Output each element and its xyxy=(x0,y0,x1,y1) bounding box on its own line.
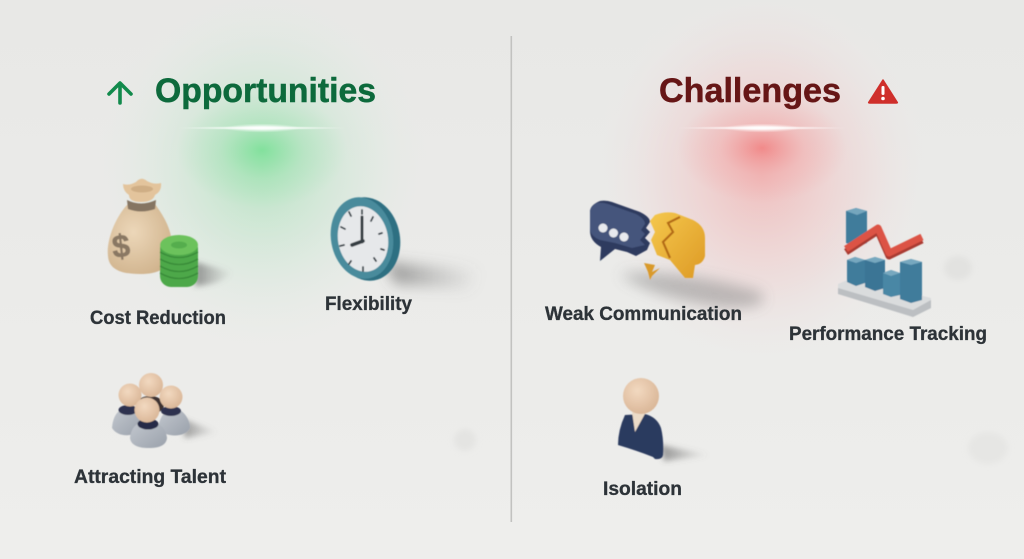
left person xyxy=(112,384,143,435)
label: Cost Reduction: Cost Reduction xyxy=(90,308,226,329)
top bar xyxy=(846,208,867,247)
label: Attracting Talent: Attracting Talent xyxy=(74,467,227,488)
label: Performance Tracking: Performance Tracking xyxy=(789,324,987,345)
chart base xyxy=(838,278,931,317)
icon: money bag and coins xyxy=(108,179,232,287)
back person xyxy=(136,373,164,414)
heading: Challenges: Challenges xyxy=(659,72,841,110)
icon: performance chart xyxy=(838,208,931,317)
panel: challenges xyxy=(545,0,987,500)
lower bars xyxy=(847,257,865,286)
label: Isolation: Isolation xyxy=(603,479,682,500)
right person xyxy=(158,386,190,436)
red glow xyxy=(592,0,932,365)
green glow xyxy=(97,0,427,345)
center divider xyxy=(510,36,512,522)
icon: warning triangle xyxy=(869,80,897,103)
front person xyxy=(130,398,167,448)
label: Weak Communication: Weak Communication xyxy=(545,304,742,325)
heading: Opportunities: Opportunities xyxy=(155,72,376,110)
panel: opportunities xyxy=(74,0,480,488)
glowing line xyxy=(177,124,347,132)
icon: broken speech bubbles xyxy=(590,201,763,308)
icon: money bag and coins: $ xyxy=(110,227,132,265)
icon: group of people xyxy=(112,373,218,448)
heading icon: up arrow xyxy=(109,83,131,103)
icon: clock xyxy=(324,192,480,290)
glowing line xyxy=(677,124,847,132)
label: Flexibility: Flexibility xyxy=(325,294,412,315)
icon: isolated person xyxy=(618,378,710,461)
